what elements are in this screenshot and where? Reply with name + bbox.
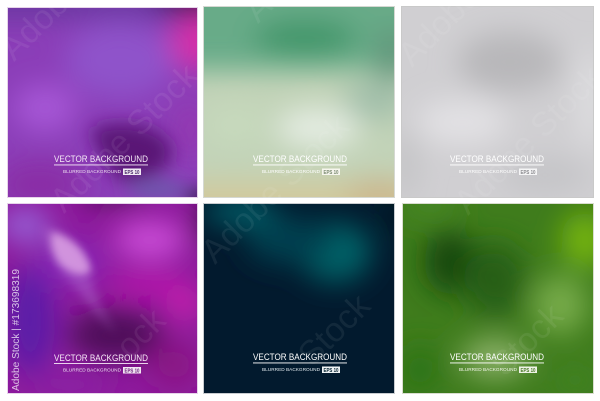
watermark: Adobe Stock diagonal text: Stock — [291, 286, 378, 374]
caption: green panel — [253, 154, 347, 176]
panel: magenta blurred background — [7, 203, 198, 394]
caption: silver panel: VECTOR BACKGROUND — [450, 154, 544, 165]
caption: green panel: VECTOR BACKGROUND — [253, 154, 347, 165]
caption: magenta panel: BLURRED BACKGROUND — [63, 368, 122, 372]
caption: green panel: BLURRED BACKGROUND — [262, 169, 321, 174]
caption: magenta panel: EPS 10 — [124, 368, 140, 374]
caption: magenta panel: VECTOR BACKGROUND — [54, 353, 148, 364]
panel: green blurred background — [203, 6, 395, 198]
caption: dark teal panel: VECTOR BACKGROUND — [253, 352, 347, 363]
caption: purple panel: VECTOR BACKGROUND — [54, 154, 148, 165]
caption: purple panel: EPS 10 — [124, 170, 140, 176]
caption: silver panel: BLURRED BACKGROUND — [459, 169, 518, 174]
watermark: Adobe Stock diagonal text: Adobe Stock — [43, 56, 207, 220]
caption: green foliage panel: EPS 10 — [520, 368, 536, 374]
panel: green foliage blurred background — [402, 203, 594, 394]
caption: dark teal panel: BLURRED BACKGROUND — [262, 367, 321, 372]
caption: silver panel: EPS 10 — [520, 170, 536, 176]
caption: green panel: EPS 10 — [324, 170, 339, 176]
watermark: Adobe Stock diagonal text: ock — [109, 301, 174, 366]
caption: purple panel — [54, 154, 148, 176]
caption: dark teal panel: EPS 10 — [324, 368, 339, 374]
panel: dark teal blurred background — [203, 195, 407, 394]
caption: green foliage panel: BLURRED BACKGROUND — [459, 367, 518, 372]
caption: green foliage panel — [450, 352, 544, 374]
caption: green foliage panel: VECTOR BACKGROUND — [450, 352, 544, 363]
watermark: Adobe Stock diagonal text: Stock — [484, 296, 571, 384]
caption: magenta panel — [54, 353, 148, 374]
panel: purple blurred background — [7, 7, 198, 198]
caption: silver panel — [450, 154, 544, 176]
caption: dark teal panel — [253, 352, 347, 374]
caption: purple panel: BLURRED BACKGROUND — [63, 169, 122, 174]
watermark: Adobe Stock diagonal text: Adobe Stock — [194, 107, 358, 271]
panel: silver blurred background — [393, 6, 600, 200]
stock id: vertical credit text: Adobe Stock | #173698319 — [10, 269, 22, 391]
